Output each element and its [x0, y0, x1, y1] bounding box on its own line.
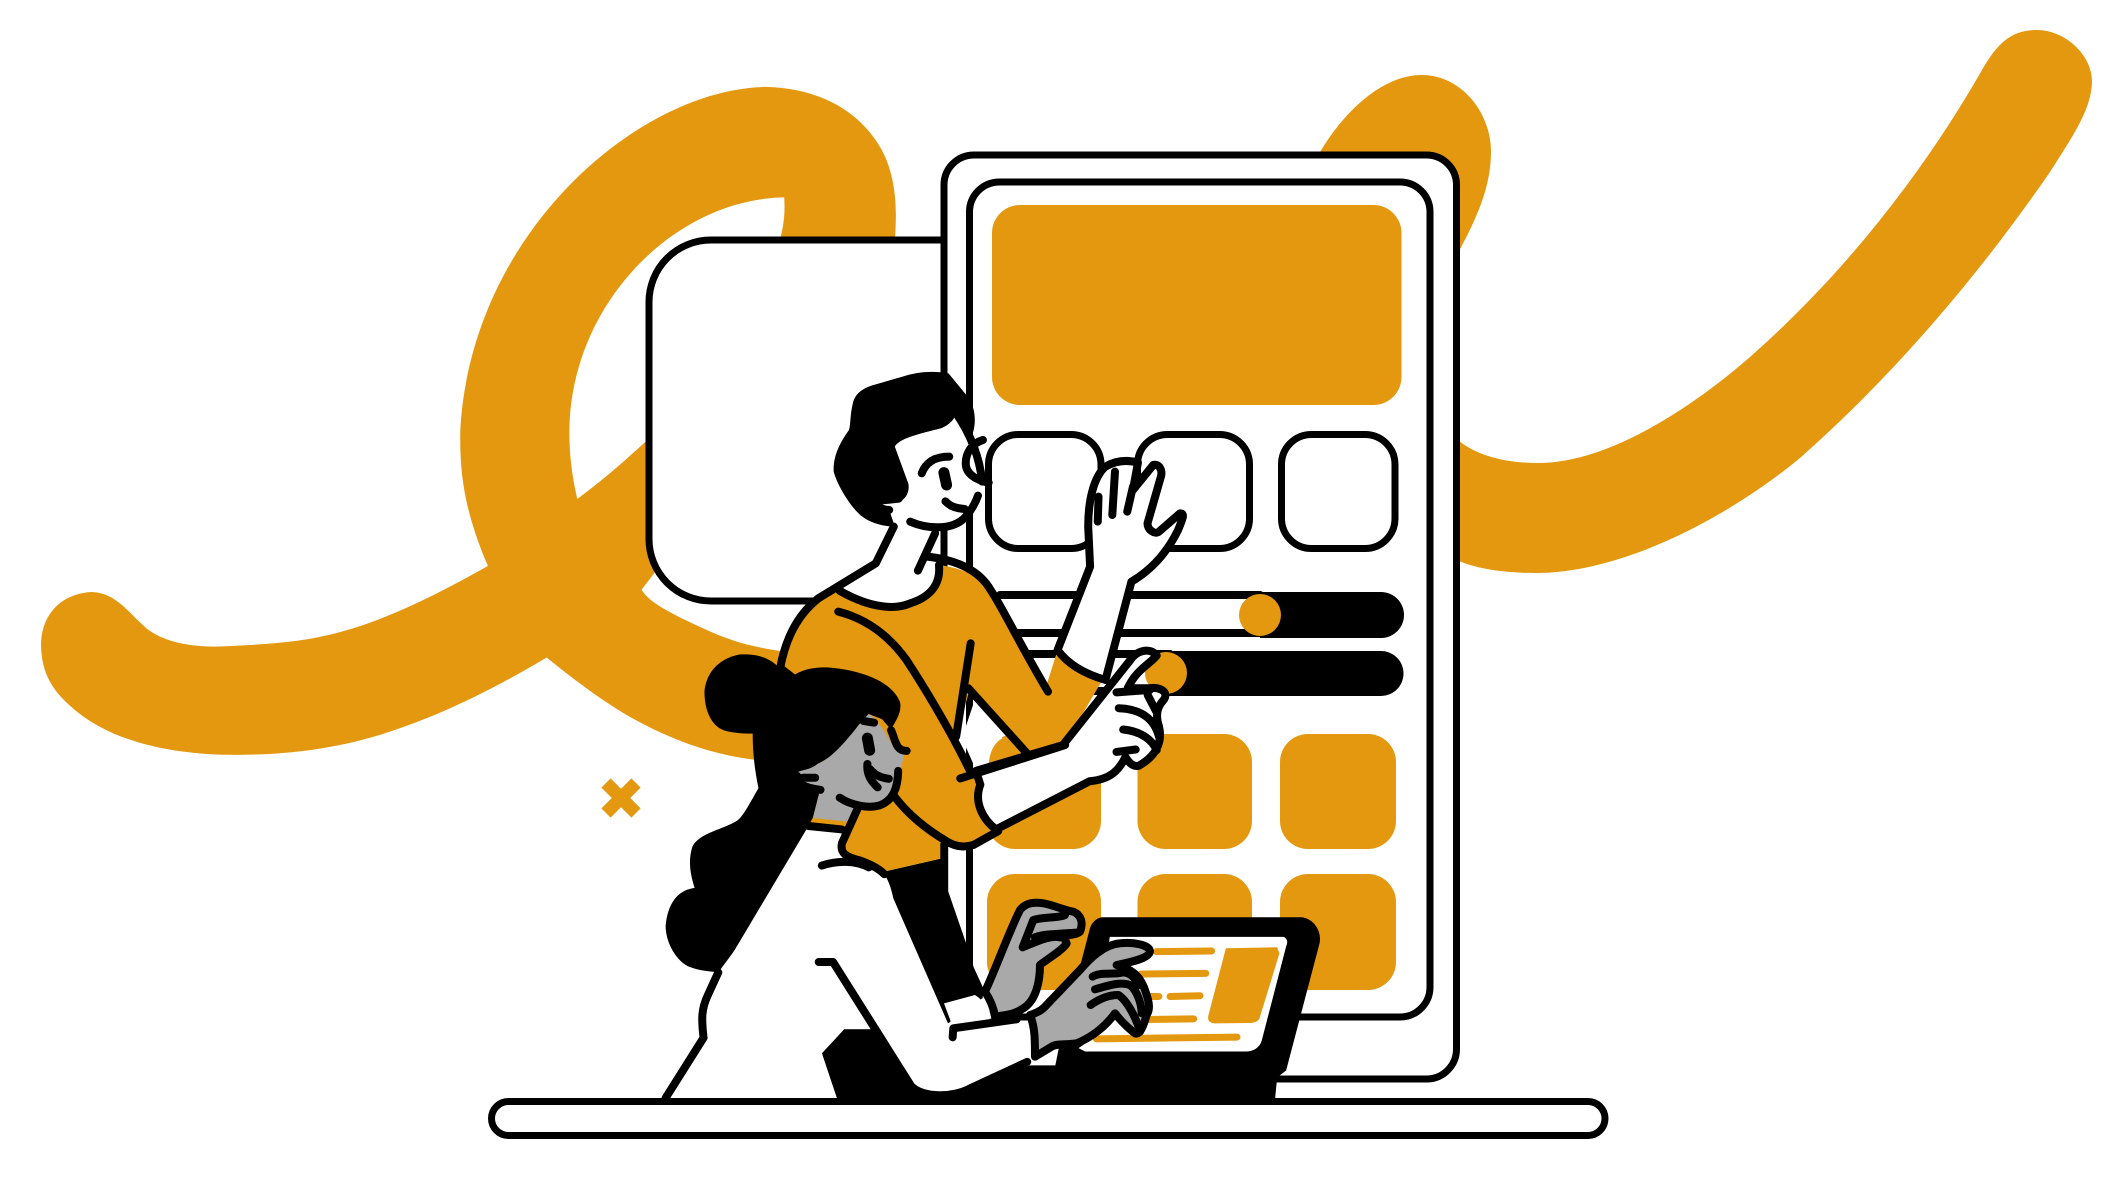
man hand finger lines [960, 690, 1159, 778]
panel: back white card [649, 240, 950, 601]
man hair [834, 372, 975, 527]
laptop screen text lines [1096, 951, 1237, 1039]
woman facial features [797, 721, 907, 807]
white buttons row [988, 434, 1395, 548]
man: trousers and lower shirt [779, 640, 996, 1029]
woman [666, 654, 1032, 1101]
man shirt [780, 565, 1103, 840]
upper hand thumb lines [1023, 915, 1077, 947]
lower hand [1030, 943, 1150, 1057]
laptop body [936, 917, 1320, 1100]
white gap under sleeve [962, 704, 1018, 770]
man: forward arm and pointing hand [893, 651, 1165, 846]
man shirt outlines [780, 527, 1048, 770]
calculator outer body [944, 155, 1456, 1079]
ground bar [492, 1102, 1605, 1136]
slider one [1000, 592, 1404, 638]
man face [875, 413, 982, 527]
laptop screen orange block [1208, 947, 1279, 1023]
man facial features [875, 413, 989, 527]
woman face [797, 714, 905, 821]
man: head, neck, torso and raised hand [780, 372, 1183, 840]
man neck [839, 525, 939, 607]
woman hands and cuffs [944, 903, 1150, 1057]
slider two [1000, 651, 1404, 696]
woman hair [666, 654, 900, 972]
woman seat [822, 1029, 936, 1101]
laptop screen [1079, 937, 1287, 1052]
sleeve edge [953, 1019, 1017, 1037]
calculator inner body [970, 182, 1430, 1017]
woman outlines [666, 809, 1027, 1098]
icon: small orange cross [606, 783, 636, 813]
calculator screen [992, 205, 1402, 405]
calculator [944, 155, 1456, 1079]
swoosh: left loop [41, 87, 896, 760]
laptop [936, 917, 1320, 1100]
upper cuff [944, 995, 992, 1028]
upper hand [985, 903, 1082, 1017]
lower hand finger lines [1091, 973, 1142, 1032]
woman body [666, 826, 1032, 1100]
orange buttons [987, 734, 1396, 990]
man finger lines [1098, 472, 1133, 522]
man raised hand [1058, 461, 1183, 680]
swoosh: right tail [1300, 30, 2092, 573]
